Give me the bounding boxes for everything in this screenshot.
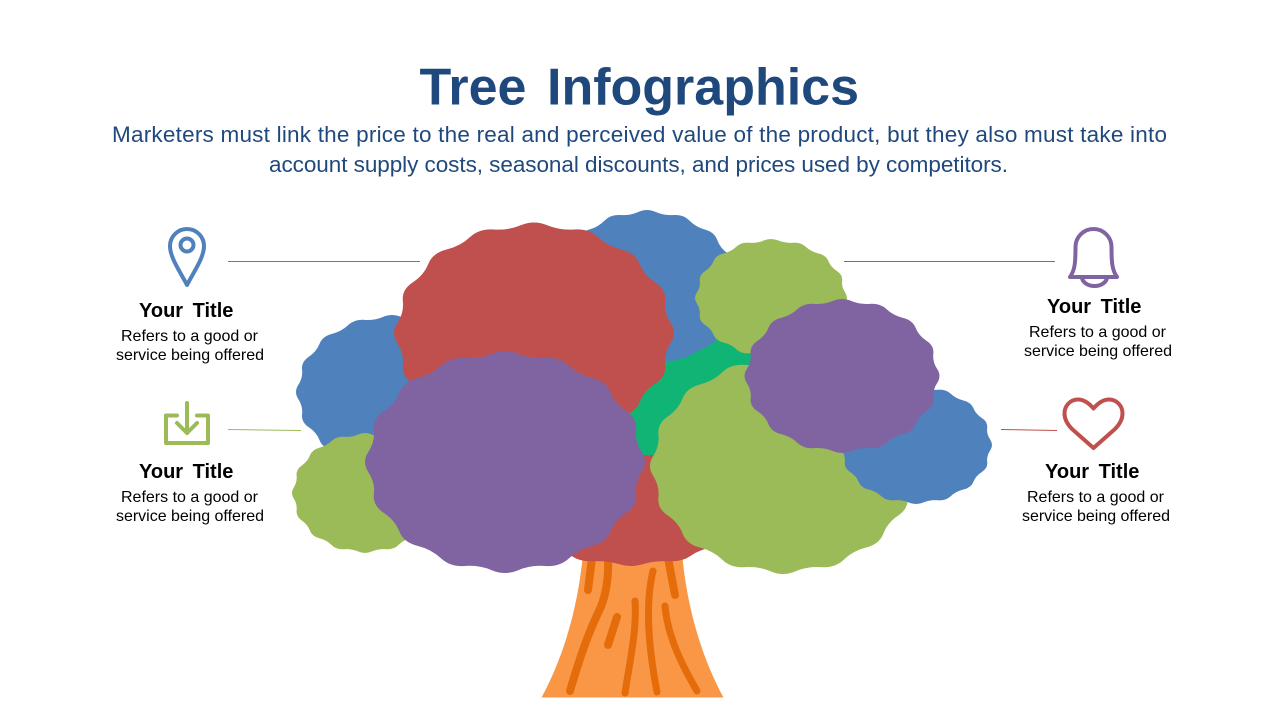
foliage: red main xyxy=(394,222,674,444)
foliage: blue left xyxy=(296,315,488,469)
foliage: green left xyxy=(292,433,438,553)
subtitle xyxy=(112,122,1167,177)
text block: bottom right: service being offered xyxy=(1022,508,1170,525)
text block: top left: Refers to a good or xyxy=(121,328,259,345)
text block: top right xyxy=(1024,296,1172,360)
connector: blue line xyxy=(228,260,420,262)
foliage: teal xyxy=(625,325,770,455)
text block: bottom right: Your Title xyxy=(1045,461,1139,483)
text block: bottom left: Refers to a good or xyxy=(121,489,259,506)
icon: heart xyxy=(1064,400,1122,448)
foliage: green upper right xyxy=(695,239,847,357)
subtitle: Marketers must link the price to the real and perceived value of the product, but they also must take into xyxy=(112,122,1167,147)
text block: top right: Refers to a good or xyxy=(1029,324,1167,341)
text block: top left: Your Title xyxy=(139,300,233,322)
foliage: green large xyxy=(650,358,916,574)
tree trunk xyxy=(542,553,724,698)
text block: bottom left xyxy=(116,461,264,525)
text block: bottom right: Refers to a good or xyxy=(1027,489,1165,506)
connector: red line xyxy=(1001,430,1057,431)
text block: bottom left: Your Title xyxy=(139,461,233,483)
text block: top left: service being offered xyxy=(116,347,264,364)
title: Tree xyxy=(420,58,526,116)
connector: green line xyxy=(228,430,301,431)
foliage: blue right xyxy=(840,386,992,504)
text block: top right: Your Title xyxy=(1047,296,1141,318)
icon: bell xyxy=(1070,229,1117,286)
text block: top right: service being offered xyxy=(1024,343,1172,360)
foliage: red lower xyxy=(501,414,761,566)
foliage: blue top xyxy=(554,210,740,370)
text block: top left xyxy=(116,300,264,364)
text block: bottom right xyxy=(1022,461,1170,525)
icon: download box xyxy=(166,403,208,443)
title: Infographics xyxy=(547,58,859,116)
icon: location pin xyxy=(170,229,204,285)
connector: purple line xyxy=(844,260,1055,262)
subtitle: account supply costs, seasonal discounts, and prices used by competitors. xyxy=(269,152,1008,177)
foliage: purple large xyxy=(365,351,645,573)
foliage: purple right xyxy=(744,299,940,453)
text block: bottom left: service being offered xyxy=(116,508,264,525)
tree canopy xyxy=(292,210,992,574)
